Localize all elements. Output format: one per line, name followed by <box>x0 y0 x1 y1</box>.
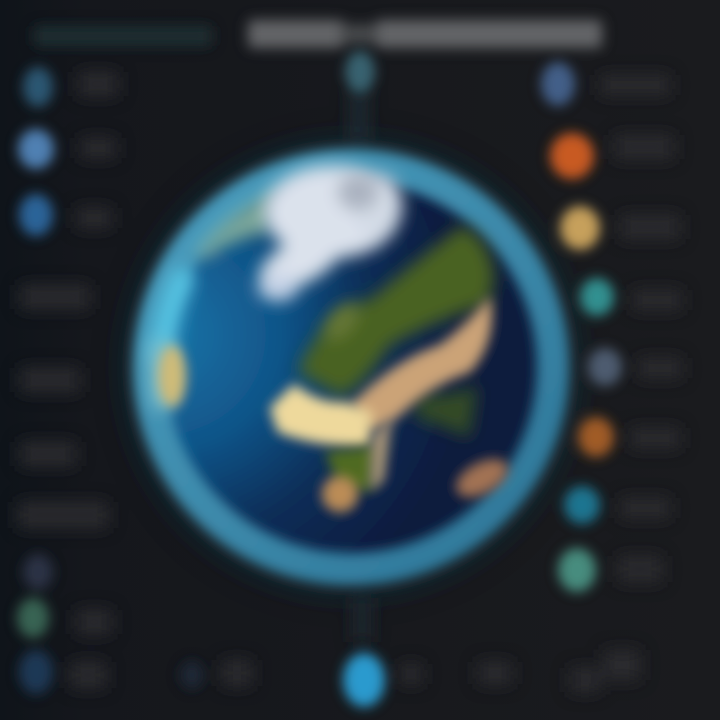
icon: right 1 <box>541 62 575 106</box>
top centre node <box>345 51 375 93</box>
southern island <box>322 476 358 512</box>
highlight on green continent <box>319 297 365 347</box>
icon: right 3, tan <box>560 206 600 250</box>
southern strip <box>370 416 392 492</box>
icon: right 2, orange <box>550 133 594 179</box>
northwest pale land <box>196 190 280 260</box>
bottom centre node <box>343 653 385 707</box>
icon: left 1 <box>23 67 53 107</box>
cloud mass <box>249 166 402 303</box>
icon: right 5, grey <box>588 348 622 386</box>
left text labels, illegible in reference <box>18 72 118 688</box>
icon: left 4 <box>23 554 53 590</box>
pale cyan limb lower <box>159 350 162 400</box>
icon: left 2 <box>18 129 54 169</box>
icon: left 5 <box>17 598 49 638</box>
green continent <box>298 226 494 396</box>
cream peninsula <box>270 384 372 446</box>
icon: right 8, green teal <box>558 548 596 592</box>
ocean disc <box>146 162 556 572</box>
left column icons <box>17 67 204 694</box>
tan desert band <box>352 296 492 429</box>
cloud grey spot <box>338 174 378 210</box>
main title, illegible in reference <box>248 20 602 48</box>
icon: right 4, teal <box>580 278 614 316</box>
icon: right 7, teal blue <box>564 486 600 524</box>
connector: top to globe <box>350 90 368 142</box>
right text labels, illegible in reference <box>600 75 682 582</box>
icon: bottom dim <box>180 661 204 689</box>
atmosphere ring <box>149 165 553 569</box>
western yellow land <box>158 345 186 407</box>
right column icons <box>541 62 622 592</box>
icon: right 6, brown <box>578 417 614 457</box>
eastern green land <box>415 385 478 438</box>
left heading, illegible in reference <box>34 26 212 46</box>
icon: left 6 <box>19 650 53 694</box>
southeastern island <box>450 452 514 504</box>
connector: globe to bottom node <box>353 598 371 642</box>
globe halo <box>125 141 577 593</box>
bottom text labels, illegible in reference <box>222 650 640 692</box>
header <box>34 20 602 48</box>
icon: left 3 <box>19 194 53 236</box>
globe <box>125 141 577 593</box>
bright cyan limb <box>162 280 182 350</box>
southern green land <box>325 446 378 490</box>
